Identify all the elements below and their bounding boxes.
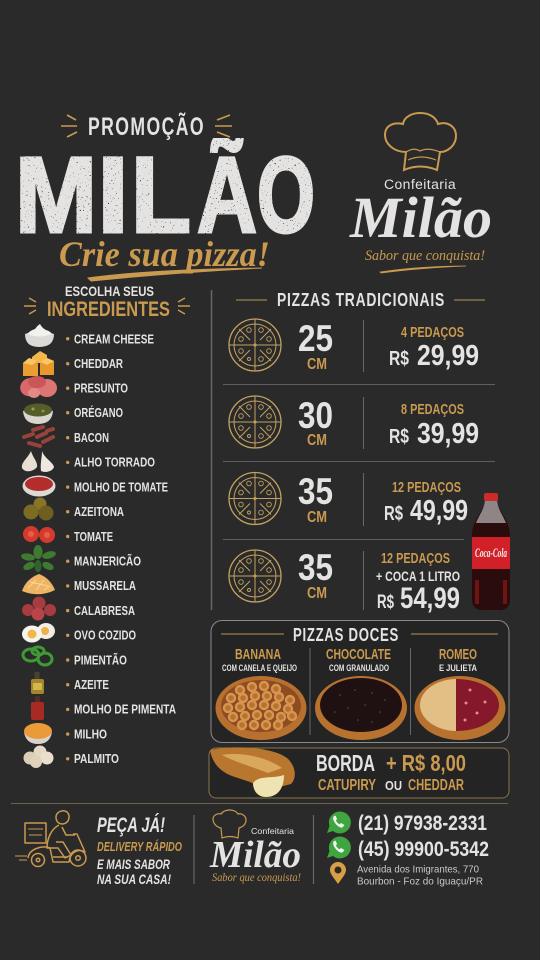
ingredient: tomate: TOMATE bbox=[74, 530, 113, 544]
panel: pizza 35 cm: R$ bbox=[384, 503, 403, 525]
panel: pizza 30 cm: R$ bbox=[389, 426, 409, 448]
ingredient: presunto bbox=[17, 375, 128, 399]
logo: confeitaria milão bbox=[349, 113, 492, 273]
logo: footer: Milão bbox=[209, 834, 301, 876]
icon: coca-cola bottle: Coca-Cola bbox=[475, 545, 507, 560]
ingredient: alho torrado bbox=[22, 451, 155, 472]
ingredient: tomate bbox=[23, 526, 113, 544]
logo: confeitaria milão: Sabor que conquista! bbox=[365, 248, 485, 264]
label: banana: COM CANELA E QUEIJO bbox=[222, 663, 297, 673]
panel: pizza 30 cm: 30 bbox=[298, 395, 333, 436]
ingredient: bacon bbox=[24, 427, 109, 446]
title: Milão: O bbox=[257, 134, 315, 255]
panel: pizza 30 cm: 39,99 bbox=[417, 418, 479, 450]
ingredient: azeite: AZEITE bbox=[74, 678, 109, 692]
ingredient: mussarela bbox=[22, 574, 136, 594]
ingredient: cheddar bbox=[23, 351, 123, 376]
panel: pizza 25 cm: CM bbox=[307, 356, 327, 373]
icon: coca-cola bottle bbox=[472, 493, 510, 610]
ingredient: ovo cozido bbox=[22, 623, 136, 643]
panel: pizza 30 cm bbox=[229, 395, 479, 450]
divider between ingredients and prices bbox=[210, 290, 212, 610]
ingredient: milho bbox=[24, 723, 107, 744]
ingredient: manjericão bbox=[20, 545, 141, 572]
panel: pizza 25 cm: 25 bbox=[298, 318, 333, 359]
panel: pizza 35 cm: 49,99 bbox=[410, 495, 468, 527]
footer divider bbox=[11, 802, 508, 804]
icon: delivery scooter bbox=[15, 811, 86, 866]
address: Bourbon - Foz do Iguaçu/PR bbox=[357, 876, 483, 888]
panel: borda: + R$ 8,00 bbox=[386, 750, 466, 776]
label: banana: BANANA bbox=[235, 647, 281, 663]
ingredient: alho torrado: ALHO TORRADO bbox=[74, 456, 155, 470]
ingredient: milho: MILHO bbox=[74, 727, 107, 741]
icon: chef hat bbox=[385, 113, 456, 170]
icon: chef hat small bbox=[213, 810, 246, 838]
icon: whatsapp 1 bbox=[327, 811, 351, 833]
ingredient: calabresa bbox=[22, 596, 135, 620]
logo: confeitaria milão: Milão bbox=[349, 185, 492, 250]
label: romeo: ROMEO bbox=[439, 647, 477, 663]
panel: pizza 35 cm with coke: 54,99 bbox=[400, 582, 460, 615]
icon: map pin bbox=[330, 862, 346, 884]
address bbox=[357, 864, 483, 888]
icon: pizza outline bbox=[229, 319, 281, 371]
ingredient: molho de pimenta: MOLHO DE PIMENTA bbox=[74, 703, 176, 717]
text: peça já: NA SUA CASA! bbox=[97, 872, 171, 887]
panel: pizza 35 cm: 12 PEDAÇOS bbox=[392, 480, 461, 496]
icon: pizza outline bbox=[229, 396, 281, 448]
ingredient: cheddar: CHEDDAR bbox=[74, 357, 123, 371]
heading: pizzas tradicionais: PIZZAS TRADICIONAIS bbox=[277, 290, 445, 310]
panel: pizza 25 cm: R$ bbox=[389, 348, 409, 370]
subtitle: crie sua pizza: Crie sua pizza! bbox=[59, 234, 270, 274]
panel: pizza 30 cm: CM bbox=[307, 432, 327, 449]
panel: pizza 35 cm with coke: CM bbox=[307, 585, 327, 602]
ingredient: ovo cozido: OVO COZIDO bbox=[74, 629, 136, 643]
icon: pizza outline bbox=[229, 550, 281, 602]
heading: pizzas doces: PIZZAS DOCES bbox=[293, 624, 399, 645]
ingredient: molho de tomate: MOLHO DE TOMATE bbox=[74, 480, 168, 494]
panel: borda: CATUPIRY bbox=[318, 777, 376, 794]
panel: pizza 30 cm: 8 PEDAÇOS bbox=[401, 402, 464, 418]
label: chocolate bbox=[326, 647, 391, 673]
text: peça já: DELIVERY RÁPIDO bbox=[97, 839, 182, 854]
logo: confeitaria milão: Confeitaria bbox=[384, 177, 456, 192]
ingredient: pimentão bbox=[23, 647, 127, 667]
pizza: chocolate bbox=[315, 676, 407, 740]
phone number 1: (21) 97938-2331 bbox=[358, 812, 487, 835]
phone number 2: (45) 99900-5342 bbox=[358, 838, 489, 861]
panel: pizza 25 cm: 4 PEDAÇOS bbox=[401, 325, 464, 341]
ingredient: azeitona bbox=[24, 498, 124, 520]
title: Milão: L bbox=[131, 134, 191, 255]
icon: stuffed crust bbox=[210, 747, 295, 797]
ingredient: molho de tomate bbox=[22, 476, 168, 496]
address: Avenida dos Imigrantes, 770 bbox=[357, 864, 479, 876]
text: peça já: E MAIS SABOR bbox=[97, 857, 170, 872]
panel: borda: OU bbox=[385, 778, 402, 793]
panel: borda bbox=[209, 747, 509, 798]
icon: pizza outline bbox=[229, 472, 281, 524]
title: Milão bbox=[20, 138, 313, 234]
panel: pizza 35 cm bbox=[229, 471, 468, 527]
ingredient: palmito: PALMITO bbox=[74, 752, 119, 766]
label: banana bbox=[222, 647, 297, 673]
ingredient: orégano bbox=[23, 404, 123, 424]
panel: borda: BORDA bbox=[316, 750, 375, 776]
label: romeo bbox=[439, 647, 477, 673]
ingredient: presunto: PRESUNTO bbox=[74, 382, 128, 396]
panel: pizza 35 cm with coke: + COCA 1 LITRO bbox=[376, 568, 460, 584]
heading: escolha seus ingredientes: INGREDIENTES bbox=[47, 298, 170, 321]
panel: pizza 35 cm with coke: 12 PEDAÇOS bbox=[381, 551, 450, 567]
ingredient: mussarela: MUSSARELA bbox=[74, 579, 136, 593]
ingredient: calabresa: CALABRESA bbox=[74, 604, 135, 618]
text: peça já: PEÇA JÁ! bbox=[97, 814, 165, 837]
title: Milão: M bbox=[15, 134, 97, 255]
pizza: banana bbox=[216, 676, 306, 740]
ingredient: cream cheese: CREAM CHEESE bbox=[74, 332, 154, 346]
panel: pizza 35 cm with coke: R$ bbox=[377, 592, 394, 613]
ingredient: azeite bbox=[31, 672, 109, 694]
text: peça já bbox=[97, 814, 182, 887]
panel: pizzas doces bbox=[211, 620, 509, 742]
pizza: romeo e julieta bbox=[414, 676, 506, 740]
heading: escolha seus ingredientes: ESCOLHA SEUS bbox=[65, 283, 154, 299]
panel: pizza 35 cm: 35 bbox=[298, 471, 333, 512]
panel: pizza 35 cm with coke bbox=[229, 547, 460, 615]
ingredient: bacon: BACON bbox=[74, 431, 109, 445]
panel: pizza 35 cm with coke: 35 bbox=[298, 547, 333, 588]
ingredient: manjericão: MANJERICÃO bbox=[74, 554, 141, 568]
logo: footer bbox=[209, 810, 301, 884]
ingredient: palmito bbox=[24, 746, 119, 768]
ingredient: molho de pimenta bbox=[31, 696, 176, 720]
heading: escolha seus ingredientes bbox=[24, 283, 190, 321]
title: Milão: Ã bbox=[197, 134, 257, 255]
logo: footer: Confeitaria bbox=[251, 826, 294, 836]
ingredient: pimentão: PIMENTÃO bbox=[74, 652, 127, 667]
label: chocolate: CHOCOLATE bbox=[326, 647, 391, 663]
panel: pizza 35 cm: CM bbox=[307, 509, 327, 526]
icon: whatsapp 2 bbox=[327, 836, 351, 858]
label: romeo: E JULIETA bbox=[439, 663, 477, 673]
ingredient: azeitona: AZEITONA bbox=[74, 505, 124, 519]
panel: pizza 25 cm bbox=[229, 318, 479, 373]
label: chocolate: COM GRANULADO bbox=[329, 663, 389, 673]
ingredient: orégano: ORÉGANO bbox=[74, 405, 123, 420]
panel: ingredients list bbox=[17, 324, 176, 768]
logo: footer: Sabor que conquista! bbox=[212, 870, 301, 884]
heading: promoção: PROMOÇÃO bbox=[88, 111, 205, 141]
title: Milão: I bbox=[97, 134, 129, 255]
panel: borda: CHEDDAR bbox=[408, 777, 464, 794]
ingredient: cream cheese bbox=[25, 324, 154, 347]
panel: pizza 25 cm: 29,99 bbox=[417, 340, 479, 372]
